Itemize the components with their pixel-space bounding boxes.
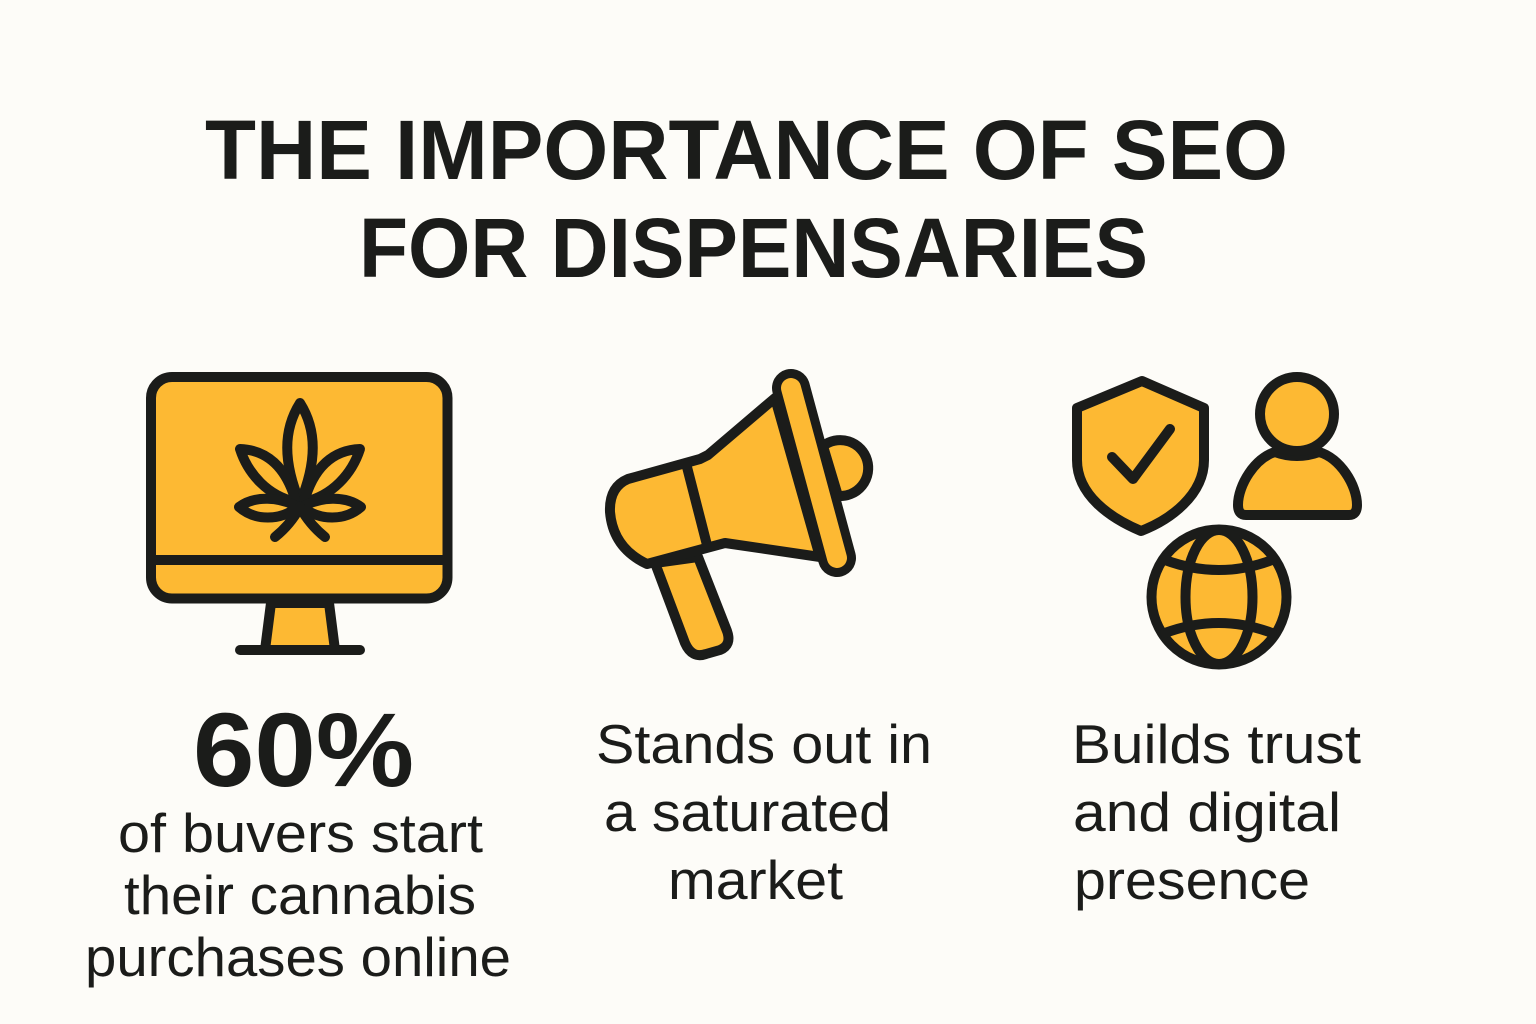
title — [205, 103, 1288, 295]
text: trust: and digital — [1073, 781, 1341, 843]
panel: 60% of buyers — [85, 377, 511, 988]
text: buyers statement: their cannabis — [124, 864, 476, 926]
stat: 60%: 60% — [193, 692, 414, 809]
text: stands out: market — [668, 849, 843, 911]
text: stands out: a saturated — [604, 781, 891, 843]
text: trust: presence — [1074, 849, 1310, 911]
text: stands out: Stands out in — [596, 713, 932, 775]
panel: stands out — [596, 388, 932, 911]
text: buyers statement — [85, 802, 511, 988]
icon: shield, person, globe — [1077, 377, 1357, 664]
icon: megaphone — [610, 388, 868, 655]
icon: monitor with cannabis leaf — [151, 377, 448, 650]
text: stands out — [596, 713, 932, 911]
title: THE IMPORTANCE OF SEO — [205, 103, 1288, 197]
panel: trust — [1072, 377, 1361, 911]
text: trust: Builds trust — [1072, 713, 1361, 775]
text: trust — [1072, 713, 1361, 911]
text: buyers statement: of buvers start — [118, 802, 483, 864]
text: buyers statement: purchases online — [85, 926, 511, 988]
title: FOR DISPENSARIES — [359, 201, 1148, 295]
